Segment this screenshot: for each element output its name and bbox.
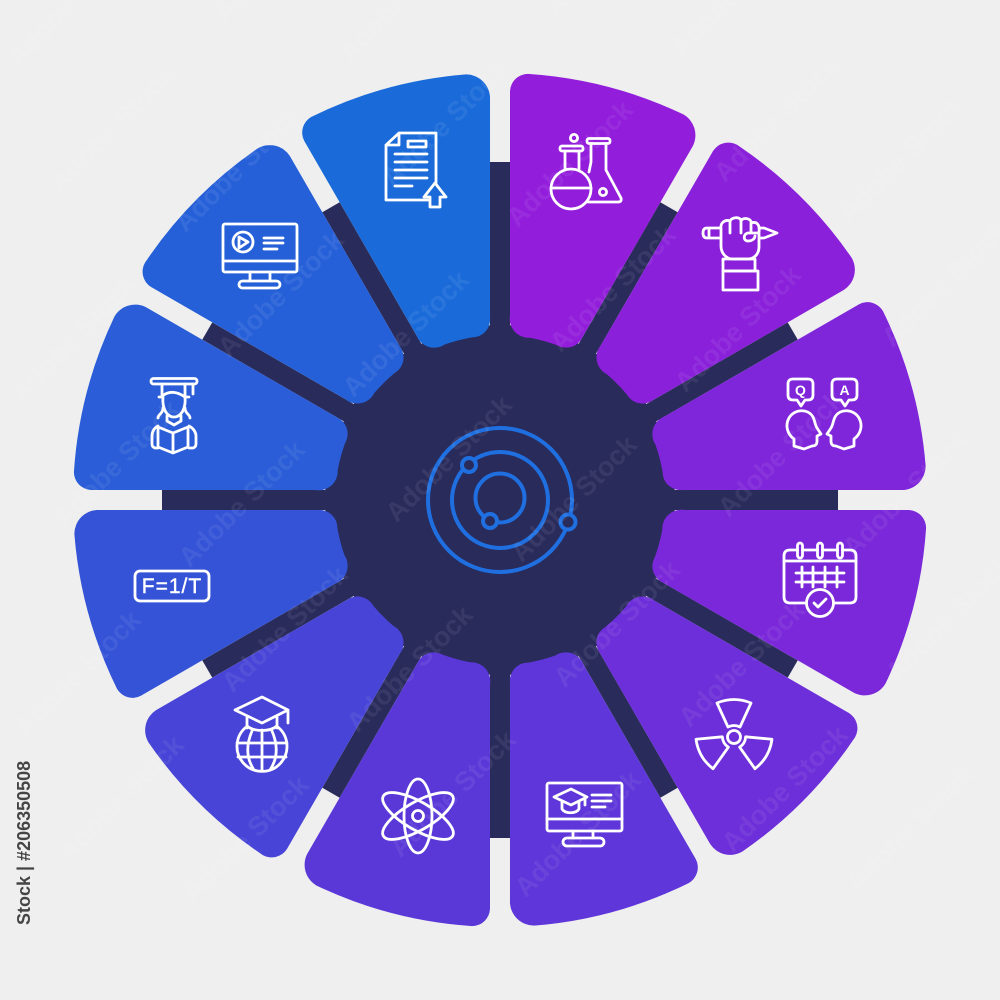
text: Adobe Stock bbox=[384, 724, 522, 863]
text: Adobe Stock bbox=[380, 389, 518, 528]
panel: document upload bbox=[295, 33, 593, 363]
text: Adobe Stock bbox=[177, 769, 315, 908]
text: Adobe Stock bbox=[376, 54, 514, 193]
text: Adobe Stock bbox=[833, 89, 971, 228]
text: Adobe Stock bbox=[173, 434, 311, 573]
text: Adobe Stock bbox=[48, 394, 186, 533]
text: Adobe Stock bbox=[9, 604, 147, 743]
panel: graduation globe bbox=[118, 534, 415, 864]
text: Adobe Stock bbox=[841, 759, 979, 898]
text: Adobe Stock bbox=[212, 224, 350, 363]
text: Adobe Stock bbox=[337, 264, 475, 403]
text: Adobe Stock bbox=[216, 559, 354, 698]
panel: question and answer bbox=[637, 295, 967, 593]
panel: calendar bbox=[652, 510, 926, 695]
stock id side text: Stock | #206350508 bbox=[14, 761, 34, 925]
panel: question and answer: A bbox=[839, 382, 850, 398]
text: Adobe Stock bbox=[548, 554, 686, 693]
panel: formula bbox=[33, 407, 363, 705]
panel: radiation bbox=[534, 585, 864, 882]
text: Adobe Stock bbox=[712, 384, 850, 523]
panel: online graduation monitor bbox=[407, 637, 705, 967]
dark hub with spokes bbox=[162, 162, 838, 838]
text: Adobe Stock bbox=[716, 719, 854, 858]
panel: formula: F=1/T bbox=[142, 575, 202, 598]
panel: question and answer: Q bbox=[795, 382, 806, 398]
text: Adobe Stock bbox=[341, 599, 479, 738]
text: Adobe Stock bbox=[505, 429, 643, 568]
text: Adobe Stock bbox=[5, 269, 143, 408]
panel: video monitor bbox=[136, 118, 466, 415]
text: Adobe Stock bbox=[509, 764, 647, 903]
panel: graduate reading bbox=[74, 305, 348, 490]
text: Adobe Stock bbox=[52, 729, 190, 868]
text: Adobe Stock bbox=[837, 424, 975, 563]
text: Adobe Stock bbox=[169, 99, 307, 238]
panel: hand holding pencil bbox=[585, 136, 882, 466]
text: Adobe Stock bbox=[669, 259, 807, 398]
text: Adobe Stock bbox=[708, 49, 846, 188]
text: Adobe Stock bbox=[501, 94, 639, 233]
panel: atom bbox=[305, 652, 490, 926]
text: Adobe Stock bbox=[44, 59, 182, 198]
icon: solar system in the hub bbox=[428, 428, 576, 572]
text: Adobe Stock bbox=[673, 594, 811, 733]
panel: flasks bbox=[510, 74, 695, 348]
text: Adobe Stock bbox=[544, 219, 682, 358]
